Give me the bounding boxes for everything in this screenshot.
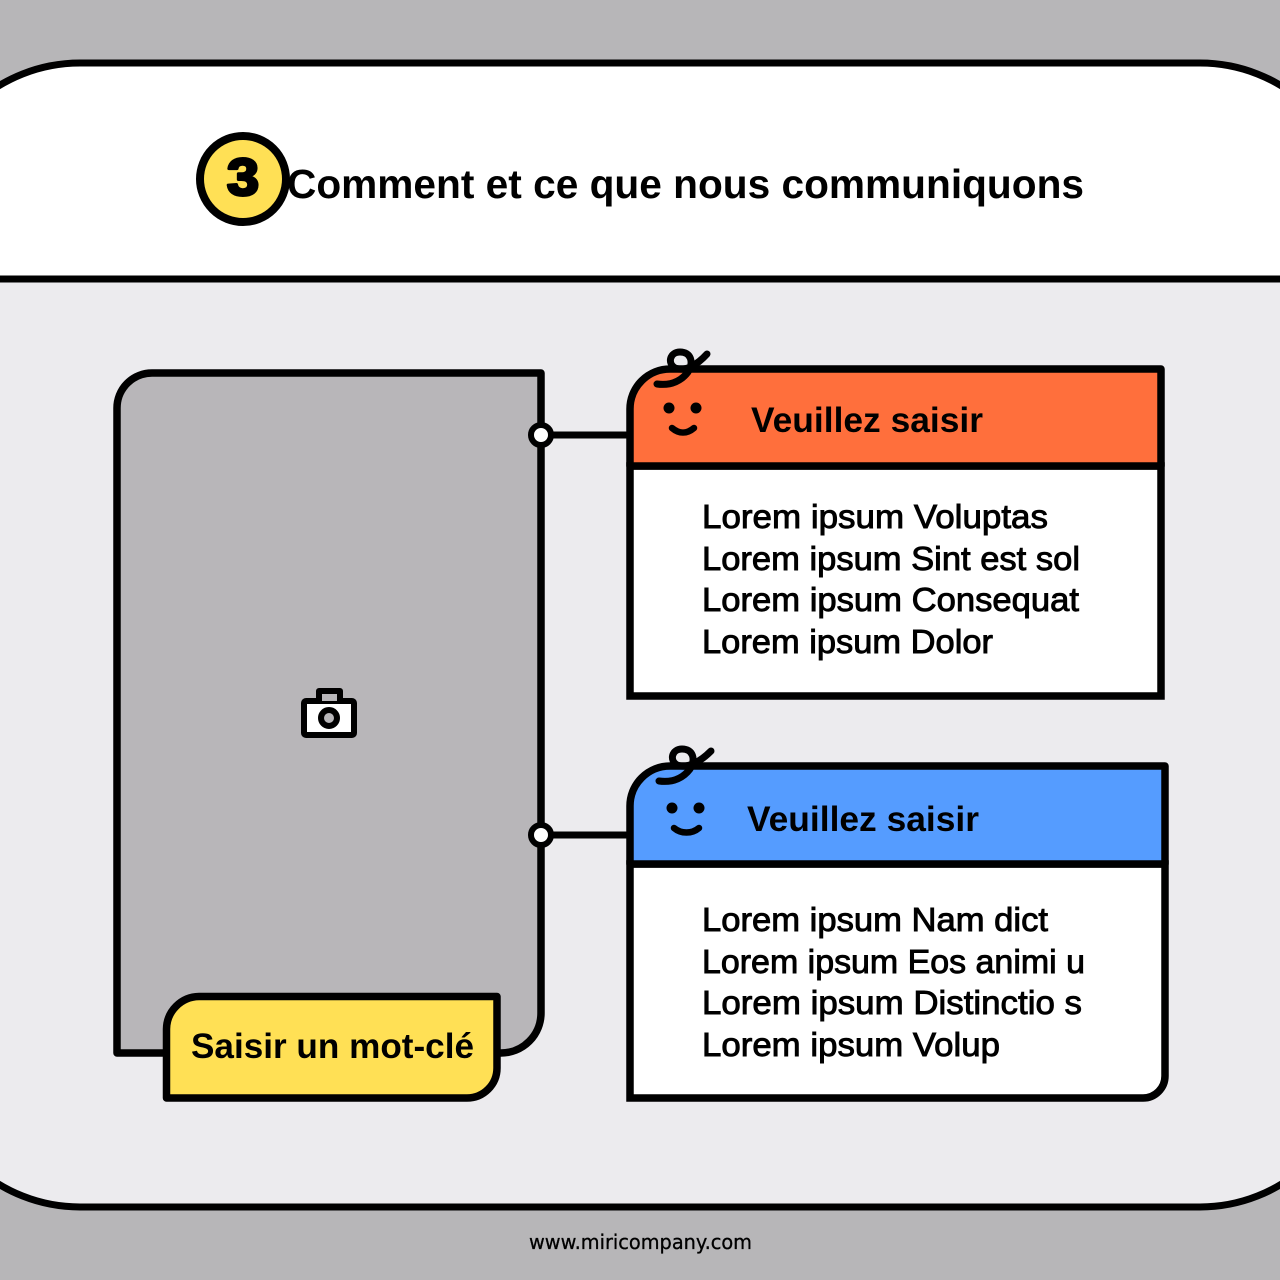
icon: smiling face — [657, 352, 707, 432]
card list: Lorem ipsum Nam dict — [702, 901, 1048, 938]
card heading: Veuillez saisir — [751, 401, 983, 440]
panel header area — [0, 63, 1280, 279]
card list: Lorem ipsum Consequat — [702, 581, 1079, 618]
connector dot: orange card — [531, 425, 551, 445]
keyword tag — [166, 996, 497, 1098]
icon: smiling face — [659, 749, 711, 832]
card heading: Veuillez saisir — [747, 800, 979, 839]
number badge — [200, 136, 286, 222]
card body — [630, 466, 1161, 696]
footer url: www.miricompany.com — [529, 1230, 752, 1254]
tag label: Saisir un mot-clé — [191, 1027, 474, 1066]
card header — [630, 369, 1161, 466]
connector dot: blue card — [531, 825, 551, 845]
card list: Lorem ipsum Voluptas — [702, 498, 1048, 535]
icon: camera — [304, 691, 354, 735]
card list: Lorem ipsum Volup — [702, 1026, 1000, 1063]
card list: Lorem ipsum Dolor — [702, 623, 993, 660]
card header — [630, 766, 1165, 864]
card list: Lorem ipsum Eos animi u — [702, 943, 1085, 980]
card body — [630, 864, 1165, 1098]
card list: Lorem ipsum Sint est sol — [702, 540, 1080, 577]
card: orange — [630, 352, 1161, 696]
number 3: 3 — [227, 149, 259, 207]
card list — [702, 498, 1080, 660]
title: Comment et ce que nous communiquons — [287, 161, 1084, 207]
card list: Lorem ipsum Distinctio s — [702, 984, 1082, 1021]
image placeholder panel — [117, 373, 541, 1053]
card: blue — [630, 749, 1165, 1098]
connector: photo to orange card — [541, 432, 632, 438]
connector: photo to blue card — [541, 832, 632, 838]
card list — [702, 901, 1085, 1063]
